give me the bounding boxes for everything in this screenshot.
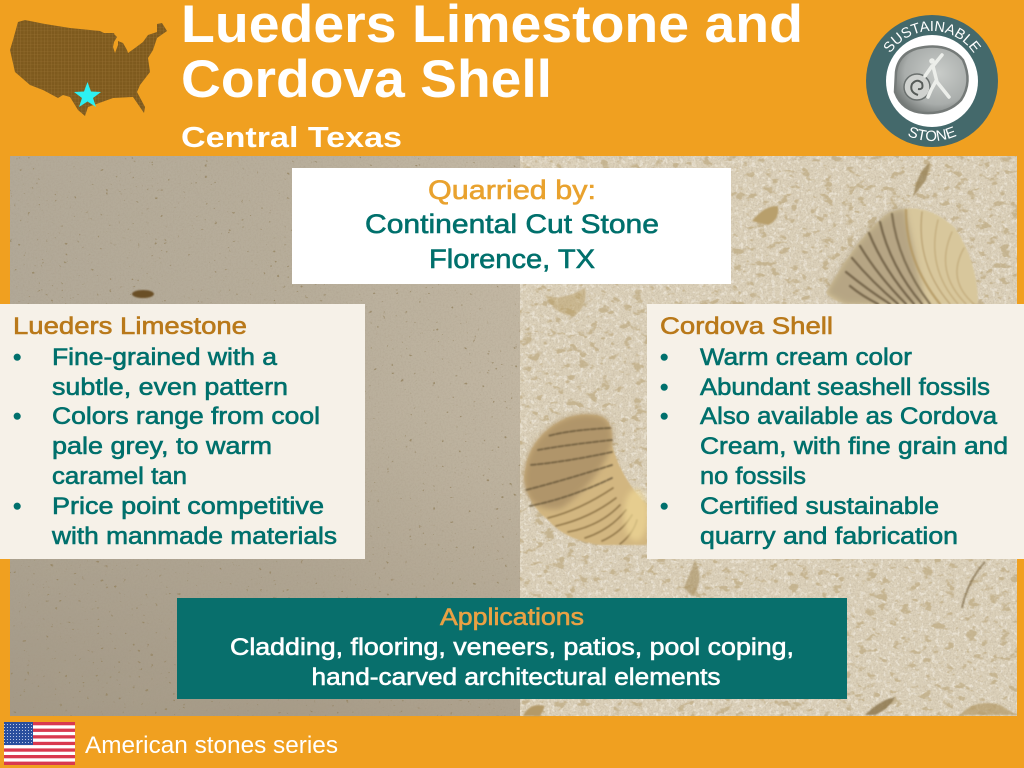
subtitle: region: Central Texas	[181, 122, 402, 154]
icon: stone coin	[895, 47, 968, 113]
text: SUSTAINABLE arc: SUSTAINABLE	[884, 21, 982, 53]
list: Cordova features: •	[660, 403, 668, 430]
callout: quarried by: Quarried by:	[428, 175, 596, 205]
text: STONE arc: STONE	[908, 126, 956, 142]
panel: Lueders limestone texture	[10, 156, 520, 716]
list: Lueders features: subtle, even pattern	[52, 374, 288, 401]
logo: Sustainable Stone seal	[866, 15, 998, 147]
panel: Applications: Applications	[440, 604, 584, 631]
list: Lueders features: Fine-grained with a	[52, 344, 278, 371]
list: Lueders features: Colors range from cool	[52, 403, 320, 430]
icon: American flag	[4, 722, 75, 765]
panel: Applications: hand-carved architectural elements	[312, 664, 720, 691]
panel: Applications: Cladding, flooring, veneers, patios, pool coping,	[230, 634, 794, 661]
list: Lueders features: pale grey, to warm	[52, 433, 272, 460]
icon: upper shell fossil	[826, 208, 978, 304]
icon: US map with location star	[10, 20, 167, 116]
list: Cordova features: •	[660, 344, 668, 371]
footer: series label: American stones series	[85, 732, 338, 759]
title: Cordova Shell	[181, 50, 552, 109]
list: Cordova features: Also available as Cordova	[700, 403, 998, 430]
panel: Cordova shell texture	[520, 156, 1017, 716]
icon: cyan star	[74, 82, 101, 107]
list: Lueders features: with manmade materials	[51, 523, 337, 550]
list: Cordova features	[660, 344, 1008, 550]
list: Lueders features: •	[13, 493, 21, 520]
list: Lueders features: •	[13, 344, 21, 371]
list: Cordova features: Cream, with fine grain and	[700, 433, 1008, 460]
callout: quarried by: Continental Cut Stone	[365, 209, 659, 239]
panel: Cordova Shell	[647, 304, 1024, 559]
list: Cordova features: Abundant seashell fossils	[700, 374, 990, 401]
panel: Applications	[177, 598, 847, 699]
heading: Cordova Shell: Cordova Shell	[660, 313, 833, 340]
list: Cordova features: Certified sustainable	[700, 493, 939, 520]
list: Cordova features: Warm cream color	[700, 344, 912, 371]
list: Cordova features: quarry and fabrication	[700, 523, 958, 550]
panel: Lueders Limestone	[0, 304, 365, 559]
list: Cordova features: •	[660, 493, 668, 520]
list: Lueders features	[13, 344, 337, 550]
list: Cordova features: •	[660, 374, 668, 401]
icon: lower shell fossil	[524, 414, 648, 545]
title	[181, 0, 803, 109]
photo: limestone and shell stone samples	[10, 156, 1017, 716]
list: Lueders features: •	[13, 403, 21, 430]
callout: quarried by: Florence, TX	[429, 244, 595, 274]
callout: quarried by	[292, 168, 731, 284]
list: Lueders features: caramel tan	[52, 463, 187, 490]
heading: Lueders Limestone: Lueders Limestone	[13, 313, 247, 340]
list: Cordova features: no fossils	[700, 463, 806, 490]
list: Lueders features: Price point competitive	[52, 493, 324, 520]
